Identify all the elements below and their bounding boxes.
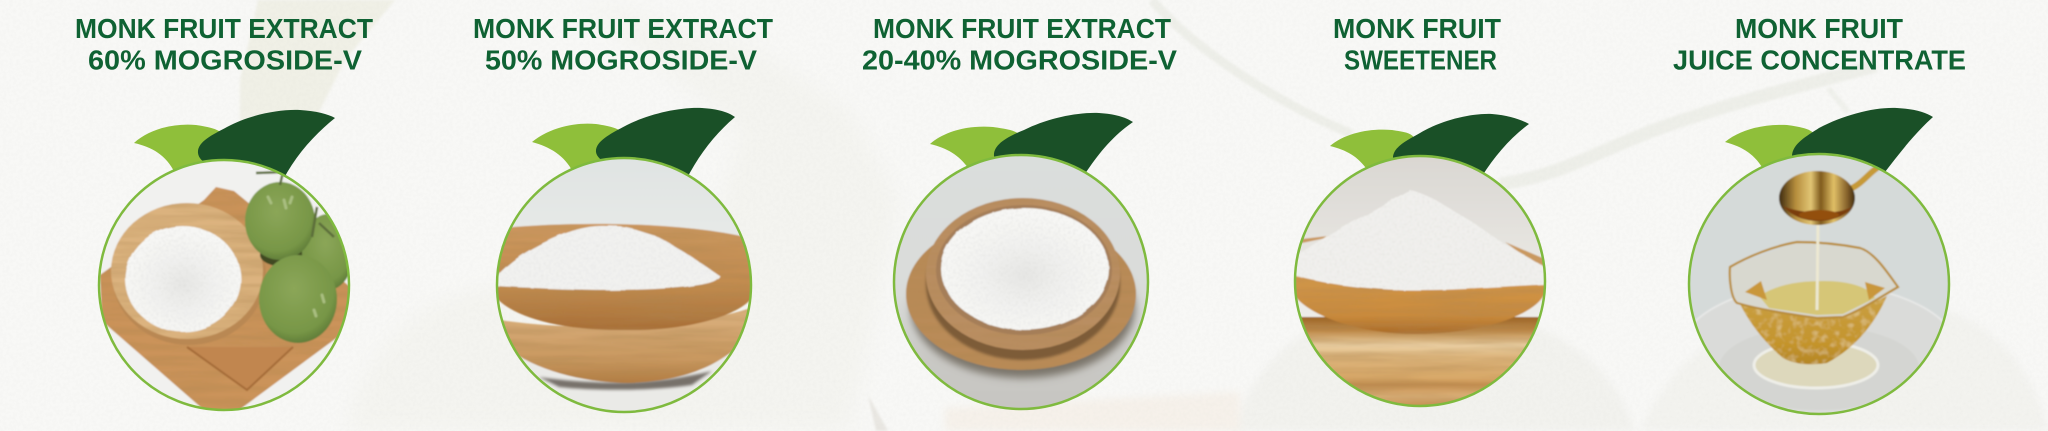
spoon handle — [1847, 166, 1880, 190]
heading: product 2: MONK FRUIT EXTRACT — [473, 13, 773, 44]
heading: product 5 — [1673, 13, 1966, 76]
cup rim — [1730, 242, 1898, 318]
syrup stream — [1817, 224, 1818, 310]
heading: product 1 — [75, 13, 373, 76]
fruit stems — [256, 172, 334, 237]
board groove — [187, 347, 293, 390]
photo: syrup poured from spoon into glass cup — [1688, 152, 1950, 416]
heading: product 3 — [862, 13, 1178, 76]
heading: product 2 — [473, 13, 773, 76]
product 1: monk fruit extract 60% — [75, 13, 373, 415]
powder — [941, 208, 1109, 330]
product 5: monk fruit juice concentrate — [1673, 13, 1966, 424]
heading: product 5: MONK FRUIT — [1735, 13, 1903, 44]
spoon bowl — [1779, 171, 1855, 225]
wooden board — [100, 187, 354, 410]
lower plate — [494, 307, 754, 383]
heading: product 2: 50% MOGROSIDE-V — [485, 44, 758, 76]
heading: product 1: 60% MOGROSIDE-V — [88, 44, 363, 76]
heading: product 5: JUICE CONCENTRATE — [1673, 44, 1966, 76]
photo: powder in stacked wooden bowls — [494, 155, 754, 415]
cup body — [1740, 296, 1887, 364]
icon: leaves 4 — [1330, 114, 1529, 176]
heading: product 4 — [1333, 13, 1501, 76]
heading: product 4: SWEETENER — [1344, 44, 1497, 76]
wooden plank — [1302, 316, 1538, 405]
icon: leaves 5 — [1725, 108, 1933, 172]
ring — [1295, 156, 1545, 406]
amber accents — [1745, 281, 1885, 300]
sweetener mound — [1292, 190, 1548, 290]
fruit back right — [301, 214, 348, 289]
heading: product 4: MONK FRUIT — [1333, 13, 1501, 44]
heading: product 3: MONK FRUIT EXTRACT — [873, 13, 1171, 44]
heading: product 3: 20-40% MOGROSIDE-V — [862, 44, 1178, 76]
cup base — [1754, 342, 1878, 388]
inner bowl — [926, 198, 1120, 350]
photo: sweetener on wooden bowl — [1290, 151, 1550, 411]
photo: wooden bowl of powder with fruit — [94, 155, 354, 415]
shadow — [906, 290, 1140, 383]
bowl rim tips — [1302, 236, 1543, 266]
icon: leaves 2 — [532, 108, 735, 180]
ring — [894, 155, 1148, 409]
bowl shadow — [539, 371, 712, 390]
powder — [125, 226, 241, 332]
fruit top — [245, 182, 315, 260]
water drops — [268, 197, 324, 316]
upper bowl — [494, 224, 754, 330]
icon: leaves 1 — [134, 110, 335, 180]
product 3: monk fruit extract 20-40% — [862, 13, 1178, 412]
photo: powder in round wooden bowl from above — [891, 152, 1151, 412]
icon: leaves 3 — [930, 113, 1133, 177]
product 4: monk fruit sweetener — [1290, 13, 1550, 411]
heading: product 1: MONK FRUIT EXTRACT — [75, 13, 373, 44]
powder mound — [496, 226, 720, 290]
table plate reflection — [1696, 293, 1942, 322]
ring — [1689, 154, 1949, 414]
liquid surface — [1759, 281, 1875, 315]
bowl — [1295, 273, 1545, 334]
outer plate — [905, 244, 1137, 371]
fruit shadow — [259, 250, 303, 266]
bowl shadow on plate — [924, 276, 1122, 362]
bowl — [119, 267, 266, 345]
ring — [99, 160, 349, 410]
ring — [497, 158, 751, 412]
cup back glass — [1730, 242, 1898, 318]
product 2: monk fruit extract 50% — [473, 13, 773, 415]
fruit front — [259, 255, 337, 343]
